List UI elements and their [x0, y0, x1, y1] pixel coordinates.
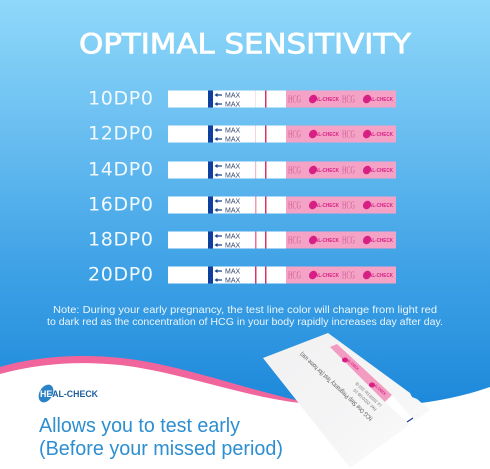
row: 12DP0 [88, 122, 396, 144]
note text: Note: During your early pregnancy, the test line color will change from light red [53, 304, 437, 316]
row: 10DP0: 10DP0 [88, 88, 153, 110]
logo [36, 382, 98, 405]
test pouch: AL-CHECK [373, 383, 387, 396]
title: OPTIMAL SENSITIVITY [79, 28, 411, 60]
tagline: Allows you to test early [39, 415, 240, 437]
logo: HEAL-CHECK [40, 389, 98, 399]
note text [47, 304, 443, 328]
row: 14DP0: 14DP0 [88, 158, 153, 180]
test pouch [263, 333, 430, 468]
row: 14DP0 [88, 158, 396, 180]
tagline: (Before your missed period) [39, 438, 283, 460]
white lower wave [0, 363, 490, 469]
row: 16DP0: 16DP0 [88, 194, 153, 216]
test pouch: Lot: 202008 Exp: 2022-08 [354, 381, 383, 408]
row: 20DP0 [88, 264, 396, 286]
pink wave [0, 356, 420, 410]
test pouch: AL-CHECK [346, 358, 360, 371]
row: 12DP0: 12DP0 [88, 122, 153, 144]
pouch label: hCG One Step Pregnancy Test (for home use) [299, 350, 374, 422]
note text: to dark red as the concentration of HCG in your body rapidly increases day after day. [47, 316, 443, 328]
test pouch: Ref: 2020-08-10 [352, 388, 378, 412]
row: 16DP0 [88, 194, 396, 216]
tagline [39, 415, 283, 460]
pouch white strip [385, 395, 425, 438]
row: 18DP0 [88, 228, 396, 250]
row: 10DP0 [88, 88, 396, 110]
row: 20DP0: 20DP0 [88, 264, 153, 286]
pink strip on pouch [330, 344, 392, 402]
row: 18DP0: 18DP0 [88, 228, 153, 250]
